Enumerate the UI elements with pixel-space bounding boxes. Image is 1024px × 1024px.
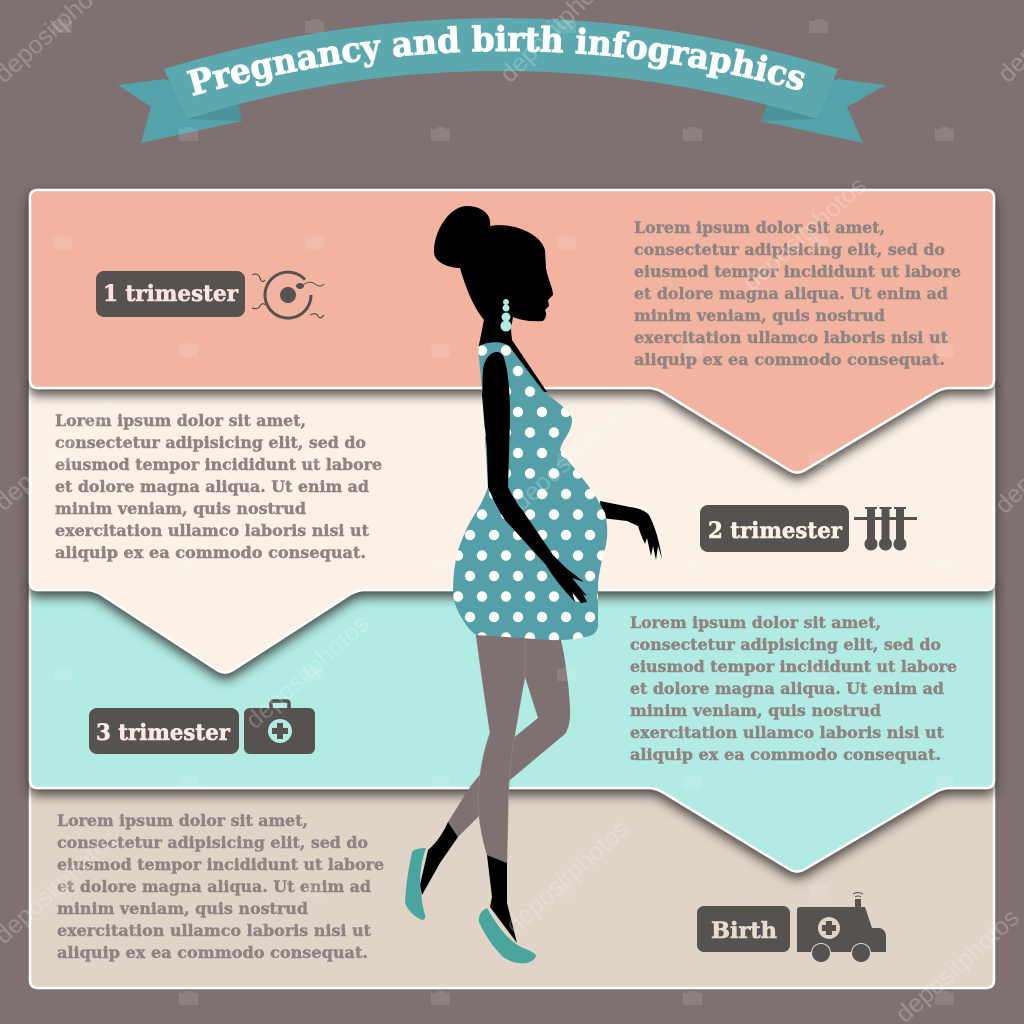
back leg [448,635,570,837]
panel: second trimester [30,380,994,672]
text block: birth [57,811,384,962]
watermark: depositphotos [240,609,375,734]
text block: first trimester: minim veniam, quis nostrud [634,306,885,325]
label: 3 trimester [89,708,239,754]
text block: third trimester: Lorem ipsum dolor sit amet, [630,613,881,632]
watermark: depositphotos [737,171,872,296]
text block: third trimester: minim veniam, quis nostrud [630,701,881,720]
ribbon left fold [187,103,242,121]
text block: birth: et dolore magna aliqua. Ut enim ad [57,877,371,896]
text block: second trimester: eiusmod tempor incididunt ut labore [55,455,382,474]
panel: first trimester [30,190,994,472]
front sock [487,855,517,943]
neck and chest [478,320,547,392]
text block: birth: minim veniam, quis nostrud [57,899,308,918]
icon: test tubes [854,507,917,550]
polka dot dress [453,342,607,640]
text block: first trimester: eiusmod tempor incididunt ut labore [634,262,961,281]
text block: first trimester: Lorem ipsum dolor sit amet, [634,218,885,237]
back shoe [405,848,426,920]
text block: third trimester: aliquip ex ea commodo consequat. [630,745,941,764]
back sock [420,822,458,895]
earring [500,299,512,332]
panel: third trimester [30,580,994,872]
front shoe [479,908,536,963]
watermark: depositphotos [507,391,642,516]
text block: birth: Lorem ipsum dolor sit amet, [57,811,308,830]
title: Pregnancy and birth infographics [186,24,805,96]
text block: third trimester [630,613,957,764]
text block: second trimester: aliquip ex ea commodo consequat. [55,543,366,562]
text block: second trimester: et dolore magna aliqua. Ut enim ad [55,477,369,496]
ribbon left tail [118,79,242,143]
head and hair [434,206,553,350]
title ribbon [118,18,886,143]
text block: birth: aliquip ex ea commodo consequat. [57,943,368,962]
label: Birth [697,906,790,952]
text block: third trimester: et dolore magna aliqua. Ut enim ad [630,679,944,698]
text block: second trimester: exercitation ullamco laboris nisi ut [55,521,370,540]
panel: birth [30,780,994,988]
text block: birth: consectetur adipisicing elit, sed do [57,833,368,852]
text block: first trimester: consectetur adipisicing elit, sed do [634,240,945,259]
pregnant woman silhouette [405,206,662,963]
front leg [476,635,525,863]
text block: third trimester: consectetur adipisicing elit, sed do [630,635,941,654]
front arm [482,352,587,603]
label: 3 trimester: 3 trimester [96,720,230,746]
icon: first aid kit [244,701,315,754]
ribbon right tail [761,79,886,143]
label: 1 trimester [96,271,245,317]
text block: third trimester: eiusmod tempor incididunt ut labore [630,657,957,676]
icon: ambulance [797,892,886,962]
text block: birth: exercitation ullamco laboris nisi ut [57,921,372,940]
text block: first trimester [634,218,961,369]
text block: first trimester: aliquip ex ea commodo consequat. [634,350,945,369]
text block: third trimester: exercitation ullamco laboris nisi ut [630,723,945,742]
text block: second trimester: consectetur adipisicing elit, sed do [55,433,366,452]
text block: first trimester: exercitation ullamco laboris nisi ut [634,328,949,347]
watermark: depositphotos [500,814,635,939]
text block: second trimester [55,411,382,562]
text block: first trimester: et dolore magna aliqua. Ut enim ad [634,284,948,303]
ribbon right fold [761,103,817,121]
label: 1 trimester: 1 trimester [103,281,238,307]
label: 2 trimester: 2 trimester [708,518,842,544]
icon: egg and sperm [252,272,324,318]
back arm [600,501,662,560]
ribbon band [164,18,838,119]
text block: birth: eiusmod tempor incididunt ut labore [57,855,384,874]
label: Birth: Birth [711,918,777,944]
label: 2 trimester [700,505,849,552]
text block: second trimester: minim veniam, quis nostrud [55,499,306,518]
text block: second trimester: Lorem ipsum dolor sit amet, [55,411,306,430]
